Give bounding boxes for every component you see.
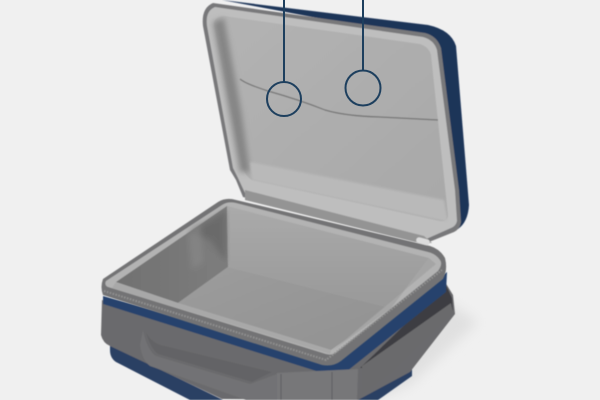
wall fold highlight <box>188 222 204 270</box>
lower case body <box>101 272 455 400</box>
lid inner panel <box>214 16 448 221</box>
navy base left <box>110 345 223 400</box>
lid inner left shadow <box>213 18 250 172</box>
navy base right <box>357 368 412 400</box>
front wall lip <box>112 282 331 354</box>
front strap <box>277 369 358 400</box>
strap stitching <box>281 372 332 400</box>
zipper pull <box>415 237 431 246</box>
case opening <box>102 199 446 366</box>
right wall <box>332 258 436 351</box>
zip teeth front <box>104 270 442 360</box>
lid hinge strip <box>245 190 432 243</box>
front handle <box>140 330 277 400</box>
lid lower padded lip <box>250 162 448 222</box>
gray body front <box>101 282 455 400</box>
callout right <box>346 0 380 106</box>
lid navy shell <box>222 0 469 232</box>
right strap <box>362 303 453 394</box>
callout left <box>267 0 301 116</box>
zipper rim <box>102 199 446 366</box>
back inner wall <box>227 206 429 308</box>
fabric binding <box>105 202 441 355</box>
inner floor <box>178 267 391 350</box>
lid binding <box>207 7 457 240</box>
shadow under case <box>350 300 478 400</box>
lid zipper frame <box>203 3 461 244</box>
wall fold shadows <box>190 210 226 262</box>
pocket slit line <box>240 79 438 120</box>
handle shadow <box>146 332 272 382</box>
navy zip band <box>103 272 447 376</box>
lid <box>203 0 469 244</box>
dark right side <box>360 285 453 368</box>
callouts <box>267 0 380 116</box>
left inner wall <box>116 206 228 303</box>
